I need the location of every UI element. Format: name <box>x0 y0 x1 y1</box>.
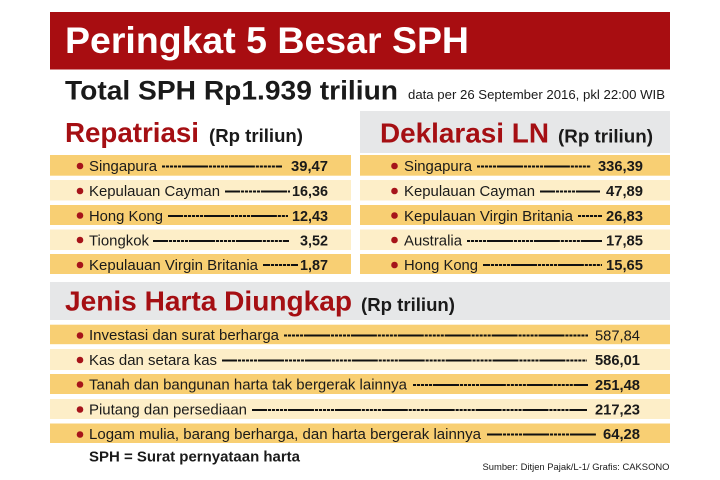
row: Hong Kong 12,43 <box>50 205 351 225</box>
row: Investasi dan surat berharga 587,84 <box>50 325 670 344</box>
heading: jenis harta diungkap: (Rp triliun) <box>361 294 455 315</box>
row: Singapura 336,39 <box>360 155 670 176</box>
heading: repatriasi: (Rp triliun) <box>209 125 303 146</box>
row: Singapura 39,47: Singapura <box>89 159 158 175</box>
heading: jenis harta diungkap <box>50 282 670 320</box>
row: Logam mulia 64,28 <box>50 424 670 443</box>
heading: repatriasi <box>65 117 303 148</box>
row: Singapura 39,47 <box>50 155 351 176</box>
row: Kepulauan Cayman 16,36: 16,36 <box>292 184 328 200</box>
subtitle: total SPH: Total SPH Rp1.939 triliun <box>65 76 398 106</box>
row: Investasi dan surat berharga 587,84: 587,84 <box>595 328 640 344</box>
row: Tanah dan bangunan 251,48: Tanah dan bangunan harta tak bergerak lainnya <box>89 378 408 394</box>
row: Tanah dan bangunan 251,48 <box>50 374 670 394</box>
row: Singapura 336,39: 336,39 <box>598 159 643 175</box>
row: Piutang dan persediaan 217,23 <box>50 399 670 419</box>
row: Singapura 336,39: Singapura <box>404 159 473 175</box>
row: Kas dan setara kas 586,01: Kas dan setara kas <box>89 353 217 369</box>
row: Kepulauan Virgin Britania 1,87: Kepulauan Virgin Britania <box>89 258 259 274</box>
row: Kepulauan Cayman 16,36: Kepulauan Cayman <box>89 184 220 200</box>
row: Piutang dan persediaan 217,23: 217,23 <box>595 402 640 418</box>
row: Singapura 39,47: 39,47 <box>291 159 328 175</box>
row: Investasi dan surat berharga 587,84: Investasi dan surat berharga <box>89 328 280 344</box>
row: Kepulauan Virgin Britania 26,83: 26,83 <box>606 209 643 225</box>
heading: jenis harta diungkap: Jenis Harta Diungkap <box>65 286 352 316</box>
row: Hong Kong 15,65 <box>360 254 670 274</box>
row: Australia 17,85 <box>360 230 670 250</box>
heading: deklarasi LN <box>360 111 670 153</box>
row: Hong Kong 12,43: 12,43 <box>292 209 328 225</box>
row: Tanah dan bangunan 251,48: 251,48 <box>595 378 640 394</box>
row: Kepulauan Cayman 47,89 <box>360 180 670 200</box>
row: Hong Kong 15,65: Hong Kong <box>404 258 478 274</box>
row: Kepulauan Cayman 47,89: 47,89 <box>606 184 643 200</box>
row: Kepulauan Virgin Britania 1,87: 1,87 <box>300 258 328 274</box>
row: Australia 17,85: Australia <box>404 234 463 250</box>
row: Hong Kong 15,65: 15,65 <box>606 258 643 274</box>
row: Kas dan setara kas 586,01: 586,01 <box>595 353 640 369</box>
title banner <box>50 12 670 70</box>
row: Piutang dan persediaan 217,23: Piutang dan persediaan <box>89 402 247 418</box>
heading: deklarasi LN: Deklarasi LN <box>380 118 549 148</box>
row: Logam mulia 64,28: Logam mulia, barang berharga, dan harta bergerak lainnya <box>89 427 482 443</box>
row: Kepulauan Cayman 16,36 <box>50 180 351 200</box>
row: Kepulauan Virgin Britania 1,87 <box>50 254 351 274</box>
footnote: SPH definition: SPH = Surat pernyataan harta <box>89 448 301 466</box>
panel: jenis harta diungkap <box>50 282 670 443</box>
row: Hong Kong 12,43: Hong Kong <box>89 209 163 225</box>
row: Tiongkok 3,52: Tiongkok <box>89 234 150 250</box>
row: Tiongkok 3,52 <box>50 230 351 250</box>
heading: deklarasi LN: (Rp triliun) <box>558 126 653 146</box>
row: Tiongkok 3,52: 3,52 <box>300 234 328 250</box>
row: Kas dan setara kas 586,01 <box>50 349 670 370</box>
data date note: data per 26 September 2016, pkl 22:00 WIB <box>408 87 665 102</box>
panel: repatriasi <box>50 117 351 274</box>
row: Logam mulia 64,28: 64,28 <box>603 427 640 443</box>
heading: repatriasi: Repatriasi <box>65 117 199 148</box>
row: Australia 17,85: 17,85 <box>606 234 643 250</box>
source credit: Sumber: Ditjen Pajak/L-1/ Grafis: CAKSONO <box>482 461 670 472</box>
row: Kepulauan Virgin Britania 26,83: Kepulauan Virgin Britania <box>404 209 574 225</box>
panel: deklarasi LN <box>360 111 670 274</box>
row: Kepulauan Virgin Britania 26,83 <box>360 205 670 225</box>
title banner: Peringkat 5 Besar SPH <box>65 19 469 61</box>
row: Kepulauan Cayman 47,89: Kepulauan Cayman <box>404 184 535 200</box>
